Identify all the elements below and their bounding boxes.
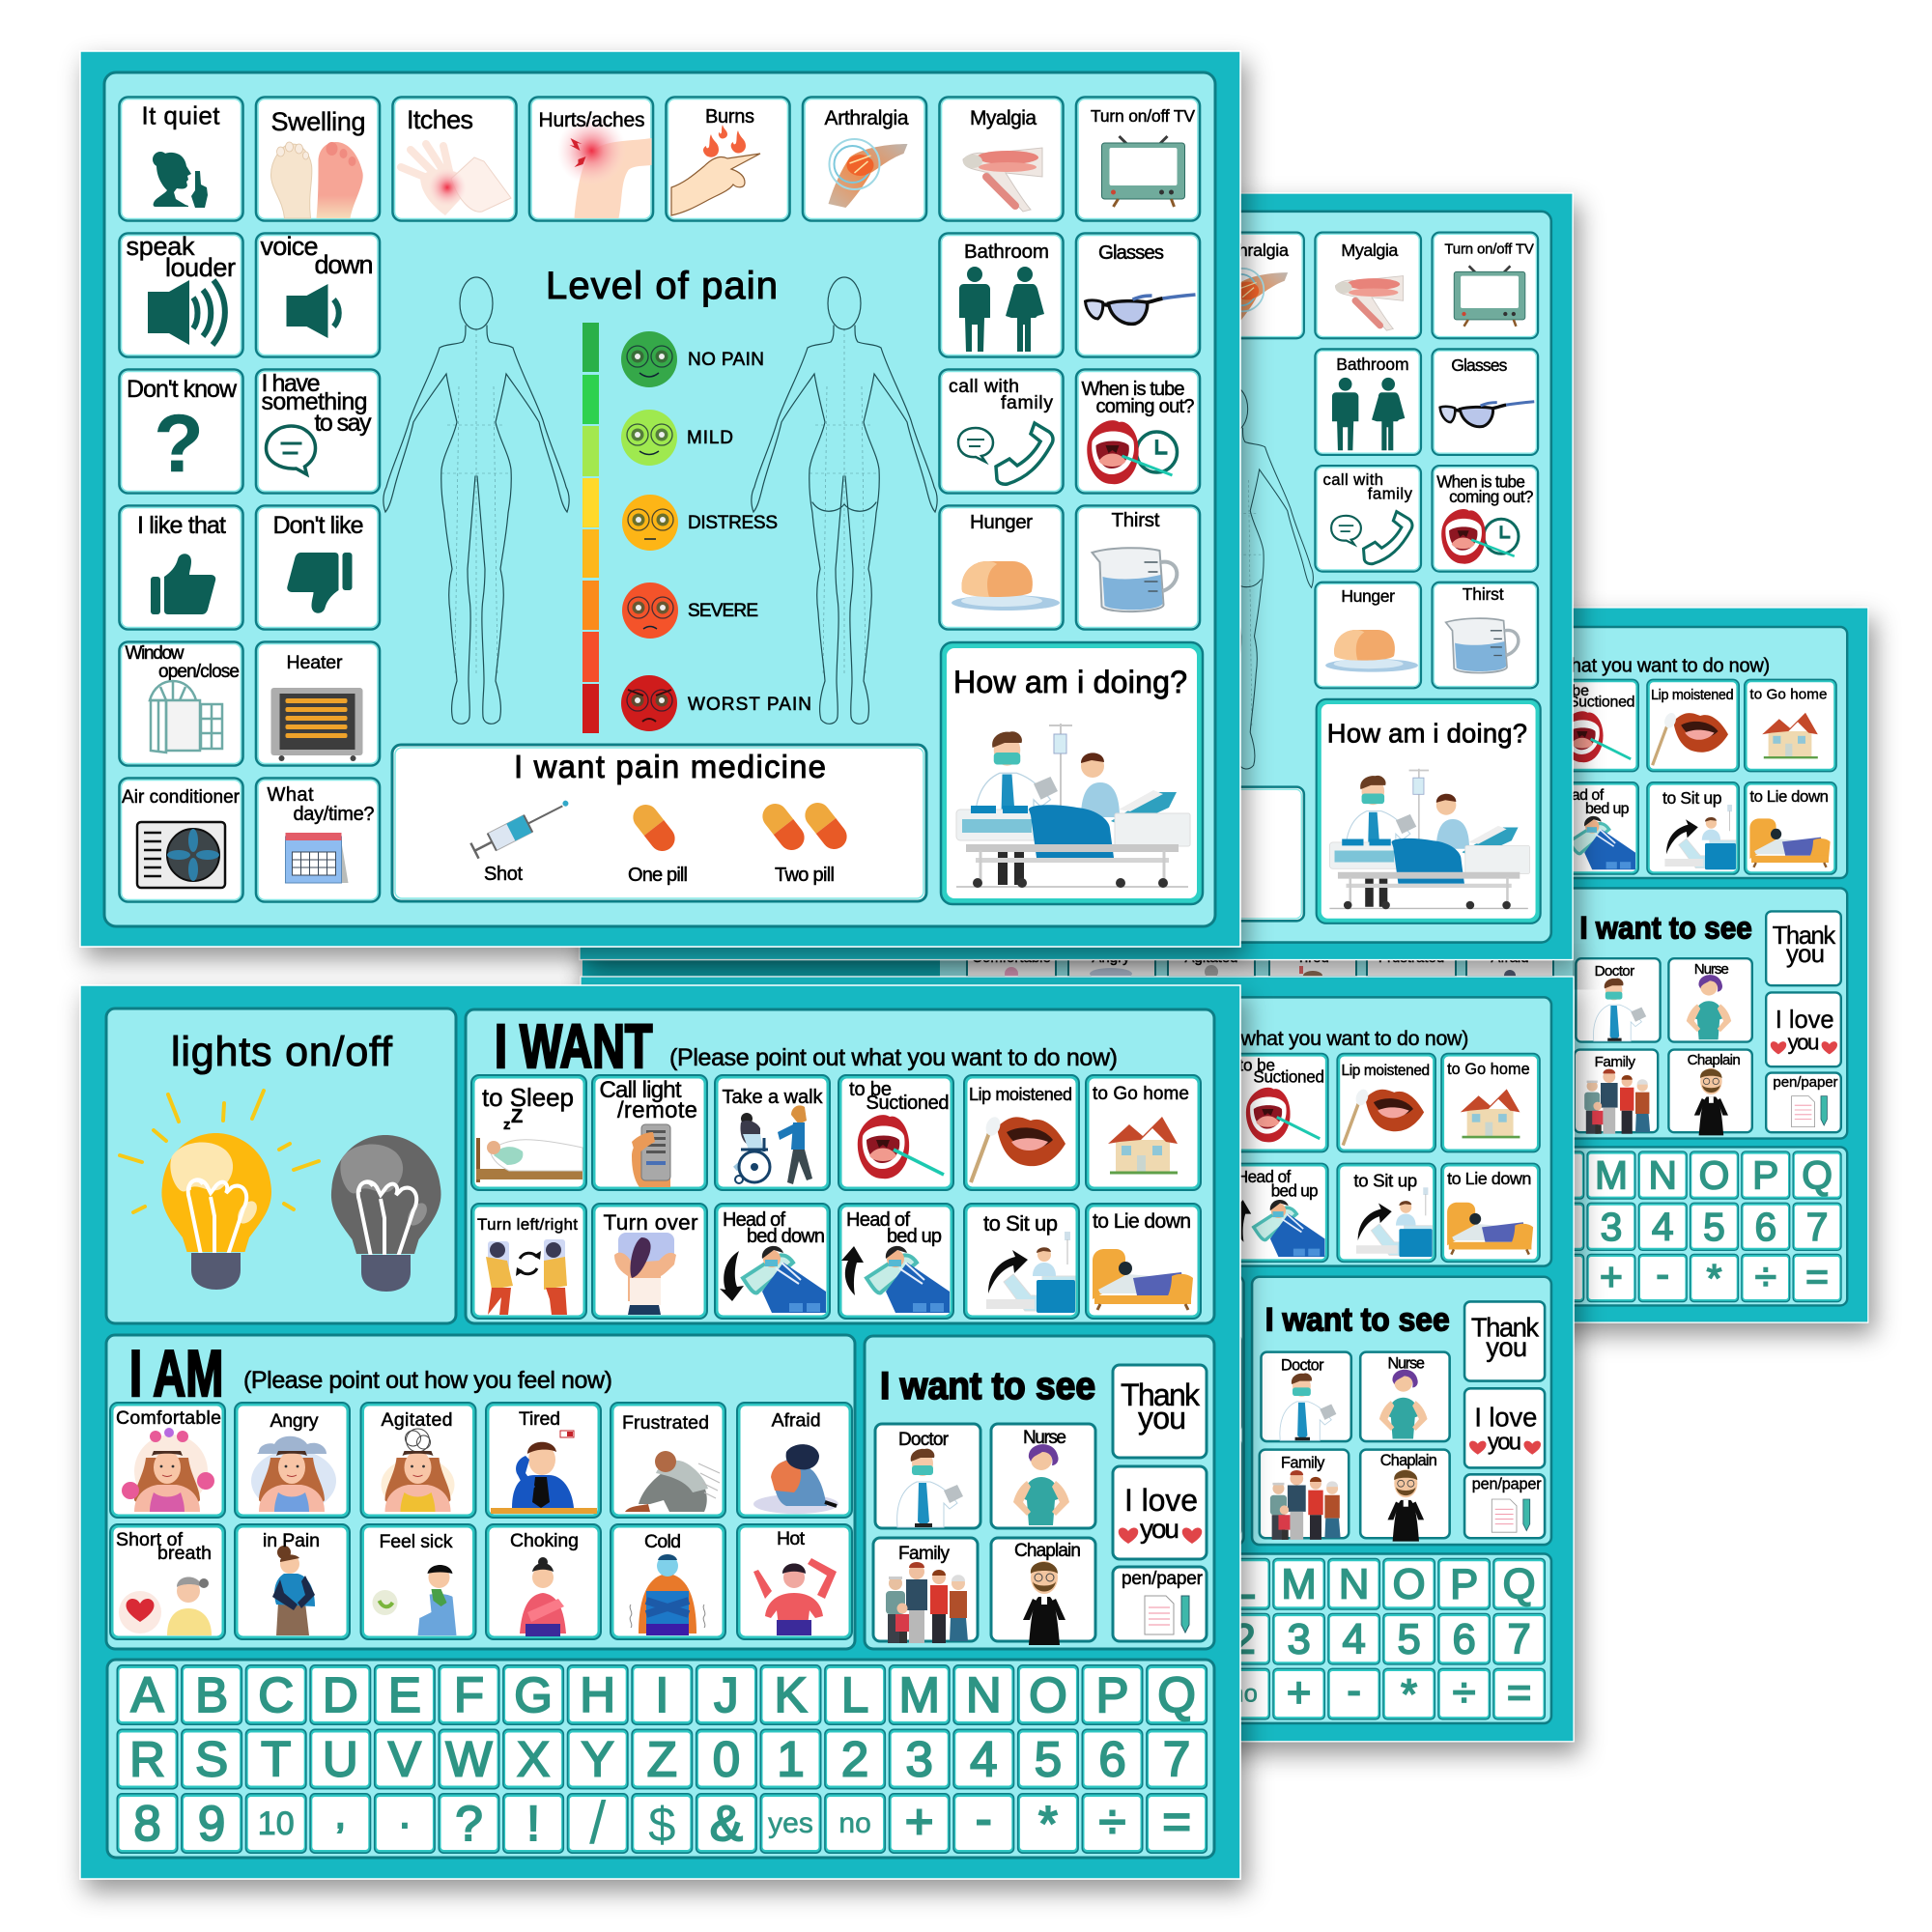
back sheet: strip of another I AM board: Afraid	[1491, 950, 1529, 966]
subheading: (Please point out how you feel now)	[243, 1367, 612, 1394]
cell: Agitated: Agitated	[381, 1409, 452, 1431]
body outline: front	[384, 277, 569, 724]
cell: Turn left/right: Turn left/right	[477, 1215, 578, 1234]
key row 2: R to 7: S	[195, 1731, 228, 1787]
cell: Comfortable	[110, 1403, 225, 1518]
cell: Doctor	[875, 1424, 980, 1528]
cell: Thank you: Thank	[1121, 1378, 1201, 1412]
cell: Cold: Cold	[644, 1531, 681, 1552]
cell: I have something to say	[256, 369, 380, 493]
cell: Choking	[486, 1524, 601, 1639]
cell: Hurts/aches	[529, 97, 653, 220]
panel: I want pain medicine	[392, 745, 926, 901]
face: severe	[622, 582, 678, 639]
label: MILD: MILD	[687, 428, 733, 448]
cell: Hot	[737, 1524, 852, 1639]
heading: I want to see: I want to see	[880, 1365, 1095, 1407]
cell: Cold	[611, 1524, 725, 1639]
label: SEVERE: SEVERE	[688, 601, 758, 621]
key row 1: A to Q: H	[580, 1667, 615, 1722]
cell: in Pain: in Pain	[263, 1530, 320, 1551]
cell: Head of bed up: Head of	[846, 1209, 910, 1231]
cell: Hurts/aches: Hurts/aches	[539, 109, 645, 131]
label: WORST PAIN: WORST PAIN	[688, 695, 811, 715]
cell: Turn on/off TV	[1076, 97, 1200, 220]
cell: Lip moistened: Lip moistened	[969, 1085, 1072, 1104]
cell: Myalgia: Myalgia	[970, 107, 1037, 129]
back sheet: strip of another I AM board	[582, 947, 1573, 986]
cell: What day/time?	[256, 779, 380, 902]
label: NO PAIN: NO PAIN	[688, 350, 764, 370]
cell: Frustrated	[611, 1403, 725, 1518]
key row 3: 8 to =: /	[589, 1790, 607, 1857]
cell: to be Suctioned	[838, 1075, 953, 1190]
key row 2: R to 7: 3	[906, 1731, 933, 1787]
cell: I have something to say: to say	[315, 410, 372, 437]
cell: Thirst	[1076, 506, 1200, 630]
cell: speak louder	[120, 232, 243, 357]
cell: Don't like: Don't like	[272, 512, 363, 539]
key row 2: R to 7: 1	[777, 1731, 805, 1787]
cell: Swelling	[256, 97, 380, 220]
panel: I want to see	[865, 1336, 1214, 1649]
cell: Chaplain	[991, 1538, 1095, 1645]
key row 2: R to 7: 4	[970, 1731, 997, 1787]
cell: Hot: Hot	[777, 1528, 806, 1549]
cell: Itches: Itches	[407, 105, 473, 134]
cell: Feel sick: Feel sick	[379, 1531, 453, 1552]
key row 3: 8 to =: +	[905, 1794, 934, 1849]
cell: to be Suctioned: to be	[849, 1079, 892, 1100]
face: distress	[622, 495, 678, 551]
panel: How am i doing?	[941, 642, 1203, 904]
cell: Swelling: Swelling	[270, 107, 365, 136]
cell: Agitated	[361, 1403, 475, 1518]
cell: Tired	[486, 1403, 601, 1518]
key row 1: A to Q: O	[1029, 1667, 1067, 1722]
cell: Afraid: Afraid	[772, 1410, 821, 1432]
cell: Thank you: you	[1138, 1401, 1186, 1435]
cell: to be Suctioned: Suctioned	[866, 1093, 949, 1114]
label: One pill: One pill	[628, 865, 688, 886]
key row 2: R to 7: Y	[582, 1731, 614, 1787]
cell: to Sleep: Z	[511, 1106, 523, 1127]
key row 3: 8 to =: &	[710, 1796, 743, 1851]
cell: to Sleep: z	[503, 1117, 510, 1133]
cell: Bathroom: Bathroom	[964, 241, 1049, 263]
cell: Burns: Burns	[705, 106, 754, 128]
cell: Itches	[392, 97, 516, 220]
cell: Myalgia	[939, 97, 1063, 220]
key row 2: R to 7: 5	[1035, 1731, 1062, 1787]
cell: Tired: Tired	[519, 1408, 560, 1430]
key row 1: A to Q: G	[514, 1667, 553, 1722]
cell: Head of bed up	[838, 1204, 953, 1319]
cell: call with family: call with	[949, 376, 1019, 397]
cell: Angry: Angry	[270, 1410, 319, 1432]
cell: Call light /remote: Call light	[599, 1077, 682, 1103]
key row 3: 8 to =: no	[838, 1807, 871, 1839]
key row 2: R to 7: X	[517, 1731, 550, 1787]
cell: to Lie down	[1086, 1204, 1201, 1319]
cell: What day/time?: What	[267, 784, 314, 806]
key row 2: R to 7: Z	[647, 1731, 677, 1787]
cell: Window open/close: Window	[126, 643, 185, 664]
key row 2: R to 7: R	[129, 1731, 165, 1787]
cell: call with family	[939, 369, 1063, 493]
key row 3: 8 to =: -	[976, 1791, 992, 1846]
cell: Family: Family	[898, 1544, 951, 1564]
icon: bulb on	[120, 1091, 319, 1290]
key row 3: 8 to =: .	[399, 1794, 410, 1836]
cell: Heater	[256, 641, 380, 765]
heading: I AM: I AM	[129, 1337, 223, 1410]
illustration: doctor and patient in hospital bed	[956, 724, 1190, 888]
panel: I WANT	[466, 1009, 1214, 1323]
cell: Window open/close	[120, 641, 243, 765]
cell: Take a walk	[715, 1075, 830, 1190]
cell: to Sleep: to Sleep	[482, 1083, 574, 1112]
cell: Don't know: ?	[154, 398, 204, 489]
cell: I love you	[1113, 1466, 1207, 1559]
key row 1: A to Q: I	[655, 1667, 668, 1722]
cell: to Sit up	[964, 1204, 1079, 1319]
cell: Don't know	[120, 369, 243, 493]
cell: Short of breath: breath	[157, 1543, 212, 1564]
cell: Head of bed up: bed up	[887, 1226, 942, 1247]
cell: Head of bed down	[715, 1204, 830, 1319]
cell: I like that	[120, 506, 243, 630]
face: worst pain	[621, 675, 677, 731]
cell: I like that: I like that	[137, 512, 226, 539]
back sheet: strip of another I AM board: Frustrated	[1378, 950, 1444, 966]
body outline: back	[752, 277, 937, 724]
cell: Glasses: Glasses	[1098, 242, 1164, 264]
key row 3: 8 to =: yes	[768, 1807, 813, 1839]
key row 2: R to 7: U	[323, 1731, 358, 1787]
back sheet: strip of another I AM board: Tired	[1296, 950, 1329, 966]
label: DISTRESS: DISTRESS	[688, 513, 778, 533]
cell: call with family: family	[1001, 392, 1053, 413]
cell: Glasses	[1076, 234, 1200, 357]
key row 2: R to 7: V	[388, 1731, 421, 1787]
cell: Heater: Heater	[286, 652, 343, 673]
label: Two pill: Two pill	[775, 865, 835, 886]
cell: voice down: voice	[261, 232, 319, 261]
cell: Chaplain: Chaplain	[1014, 1541, 1081, 1561]
cell: Nurse: Nurse	[1023, 1428, 1066, 1448]
icon: two pills	[757, 798, 852, 855]
cell: Thank you	[1113, 1365, 1207, 1458]
front sheet: pain board	[80, 51, 1240, 947]
key row 1: A to Q: A	[130, 1667, 164, 1722]
key row 1: A to Q: Q	[1157, 1667, 1196, 1722]
heading: I WANT: I WANT	[495, 1011, 652, 1081]
cell: Don't know: Don't know	[127, 376, 238, 403]
cell: It quiet	[120, 97, 243, 220]
cell: What day/time?: day/time?	[294, 804, 375, 825]
cell: When is tube coming out?: When is tube	[1082, 379, 1184, 400]
key row 2: R to 7: 0	[713, 1731, 740, 1787]
cell: Burns	[667, 97, 790, 220]
face: mild	[621, 410, 677, 466]
key row 2: R to 7: 7	[1163, 1731, 1190, 1787]
pain level color bar	[582, 323, 599, 733]
cell: I love you: you	[1140, 1514, 1179, 1544]
key row 3: 8 to =: ÷	[1099, 1794, 1126, 1849]
cell: to Go home	[1086, 1075, 1201, 1190]
back sheet: strip of another I AM board: Angry	[1092, 950, 1130, 966]
cell: Choking: Choking	[510, 1530, 579, 1551]
heading: lights on/off: lights on/off	[171, 1029, 393, 1075]
key row 1: A to Q: P	[1095, 1667, 1129, 1722]
key row 2: R to 7: T	[261, 1731, 291, 1787]
cell: Comfortable: Comfortable	[116, 1407, 221, 1429]
front sheet: I WANT / I AM board	[80, 985, 1240, 1879]
subheading: (Please point out what you want to do now)	[669, 1044, 1118, 1071]
face: no pain	[621, 331, 677, 387]
key row 1: A to Q: J	[714, 1667, 739, 1722]
key row 1: A to Q: C	[258, 1667, 294, 1722]
key row 3: 8 to =: 10	[258, 1805, 295, 1842]
cell: Turn over: Turn over	[603, 1210, 698, 1235]
back sheet: right copy of the I WANT board	[940, 608, 1868, 1322]
icon: one pill	[628, 800, 680, 856]
cell: to Sleep	[471, 1075, 586, 1190]
key row 1: A to Q: F	[454, 1667, 484, 1722]
key row 1: A to Q: E	[388, 1667, 421, 1722]
cell: voice down: down	[315, 250, 373, 279]
cell: voice down	[256, 232, 380, 357]
key row 3: 8 to =: ?	[455, 1796, 483, 1851]
key row 3: 8 to =: !	[526, 1796, 540, 1851]
icon: syringe	[470, 794, 573, 860]
key row 1: A to Q: D	[323, 1667, 358, 1722]
cell: Don't like	[256, 506, 380, 630]
cell: I have something to say: I have	[261, 370, 321, 397]
cell: Frustrated: Frustrated	[622, 1412, 709, 1434]
cell: I have something to say: something	[261, 388, 367, 415]
key row 2: R to 7: 6	[1098, 1731, 1126, 1787]
cell: Feel sick	[361, 1524, 475, 1639]
heading: Level of pain: Level of pain	[546, 265, 778, 307]
cell: I love you: I love	[1124, 1483, 1198, 1518]
key row 3: 8 to =: ,	[335, 1794, 346, 1836]
back sheet: middle copy of the I WANT board	[581, 977, 1574, 1742]
cell: speak louder: speak	[126, 232, 195, 261]
cell: Arthralgia	[803, 97, 926, 220]
back sheet: strip of another I AM board: Comfortable	[972, 950, 1051, 966]
key row 1: A to Q: N	[966, 1667, 1002, 1722]
cell: Take a walk: Take a walk	[723, 1087, 823, 1108]
cell: Hunger: Hunger	[970, 511, 1033, 533]
cell: Window open/close: open/close	[158, 662, 240, 682]
panel: alphabet, numbers and symbols keyboard	[107, 1660, 1214, 1858]
cell: Nurse	[991, 1424, 1095, 1528]
key row 2: R to 7: 2	[841, 1731, 868, 1787]
key row 3: 8 to =: 9	[198, 1796, 225, 1851]
cell: It quiet: It quiet	[141, 100, 220, 129]
cell: Turn over	[592, 1204, 707, 1319]
cell: Air conditioner: Air conditioner	[122, 787, 241, 808]
key row 2: R to 7	[117, 1729, 1207, 1789]
cell: Call light /remote: /remote	[617, 1097, 697, 1123]
back sheet: middle copy of the pain board	[580, 193, 1573, 960]
cell: Arthralgia: Arthralgia	[825, 107, 909, 129]
panel: I AM	[106, 1335, 855, 1649]
cell: in Pain	[235, 1524, 350, 1639]
cell: When is tube coming out?: coming out?	[1095, 396, 1194, 417]
label: Shot: Shot	[484, 864, 523, 885]
cell: Head of bed down: bed down	[747, 1226, 825, 1247]
cell: Thirst: Thirst	[1111, 509, 1160, 531]
key row 1: A to Q	[117, 1665, 1207, 1724]
cell: Turn left/right	[471, 1204, 586, 1319]
cell: Lip moistened	[964, 1075, 1079, 1190]
key row 3: 8 to =: 8	[133, 1796, 161, 1851]
heading: How am i doing?: How am i doing?	[953, 665, 1187, 699]
key row 3: 8 to =: *	[1038, 1796, 1058, 1851]
cell: to Lie down: to Lie down	[1093, 1210, 1191, 1233]
cell: Hunger	[939, 506, 1063, 630]
cell: Head of bed down: Head of	[723, 1209, 785, 1231]
key row 1: A to Q: L	[841, 1667, 868, 1722]
cell: Air conditioner	[120, 779, 243, 902]
cell: Afraid	[737, 1403, 852, 1518]
cell: to Sit up: to Sit up	[983, 1211, 1058, 1236]
key row 2: R to 7: W	[445, 1731, 493, 1787]
key row 1: A to Q: B	[195, 1667, 228, 1722]
cell: Call light /remote	[592, 1075, 707, 1190]
key row 1: A to Q: M	[898, 1667, 940, 1722]
key row 1: A to Q: K	[774, 1667, 808, 1722]
key row 3: 8 to =	[117, 1790, 1207, 1857]
cell: Angry	[235, 1403, 350, 1518]
key row 3: 8 to =: $	[648, 1797, 675, 1852]
cell: Doctor: Doctor	[898, 1430, 950, 1450]
cell: pen/paper: pen/paper	[1122, 1569, 1204, 1589]
cell: Short of breath: Short of	[116, 1529, 184, 1550]
key row 3: 8 to =: =	[1162, 1794, 1191, 1849]
cell: Bathroom	[939, 234, 1063, 357]
back sheet: strip of another I AM board: Agitated	[1184, 950, 1238, 966]
heading: I want pain medicine: I want pain medicine	[514, 749, 826, 784]
cell: When is tube coming out?	[1076, 369, 1200, 493]
cell: Short of breath	[110, 1524, 225, 1639]
cell: Turn on/off TV: Turn on/off TV	[1091, 106, 1195, 126]
icon: bulb off	[331, 1135, 441, 1292]
cell: speak louder: louder	[165, 253, 236, 282]
cell: pen/paper	[1113, 1567, 1207, 1641]
cell: to Go home: to Go home	[1093, 1084, 1189, 1104]
panel: lights on/off	[106, 1009, 456, 1323]
cell: Family	[873, 1538, 978, 1643]
